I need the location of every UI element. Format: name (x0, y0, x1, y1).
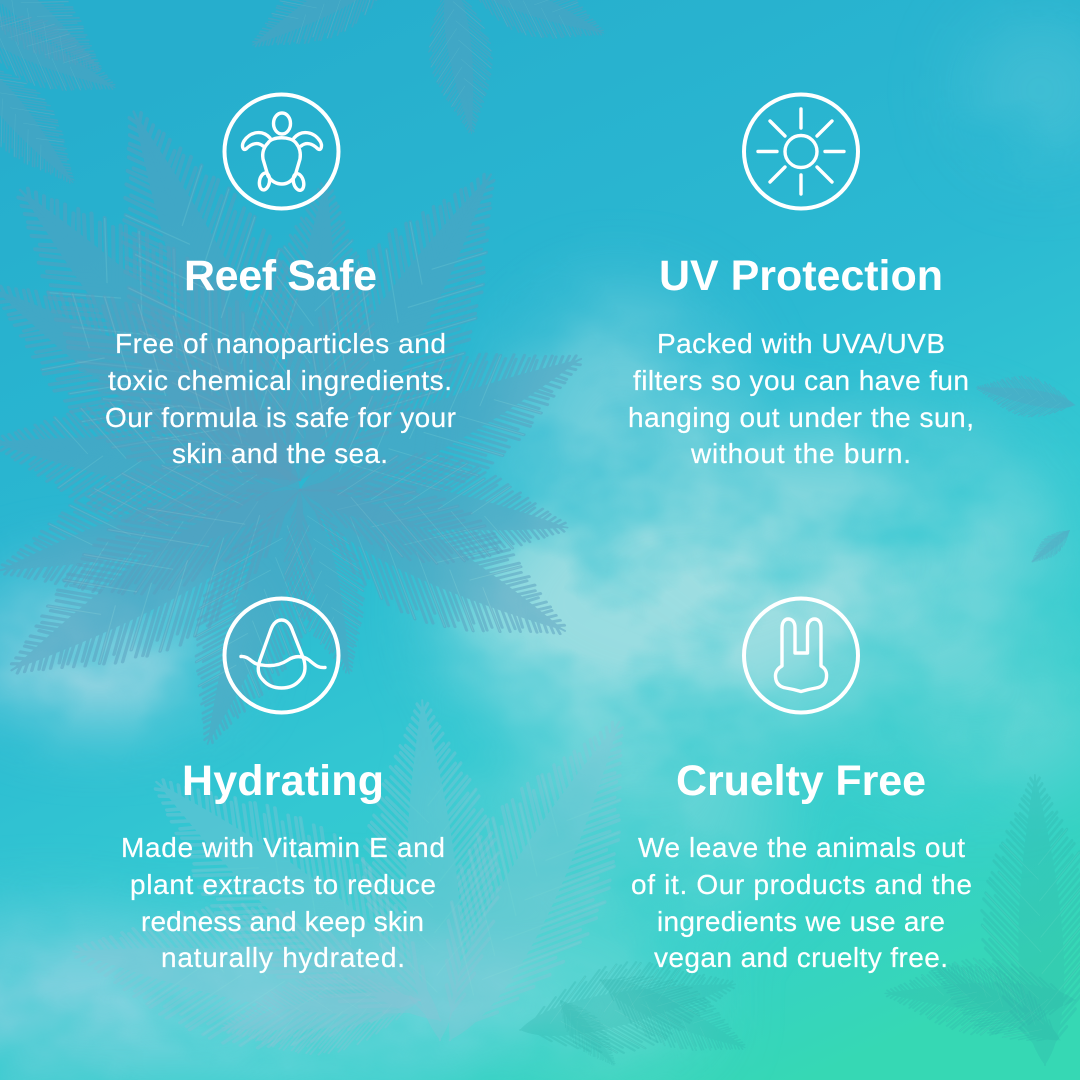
background: palm fronds, lower left tree (64, 688, 683, 1077)
background: palm fronds, upper tree (0, 0, 1078, 762)
text: hydrating description (121, 832, 445, 973)
text: cruelty free description: vegan and cruelty free. (654, 942, 948, 973)
icon: water drop with wave (224, 598, 338, 712)
text: hydrating description: naturally hydrated. (161, 942, 405, 973)
heading: Reef Safe: Reef Safe (184, 252, 377, 300)
text: reef safe description: Free of nanoparticles and (115, 328, 446, 359)
text: cruelty free description: ingredients we use are (657, 906, 945, 937)
text: uv protection description: hanging out under the sun, (628, 402, 974, 433)
icon: sun (744, 94, 858, 208)
text: reef safe description: toxic chemical ingredients. (108, 365, 452, 396)
text: hydrating description: Made with Vitamin E and (121, 832, 445, 863)
text: uv protection description: without the burn. (690, 438, 911, 469)
panel: hydrating (121, 598, 445, 973)
panel: cruelty free (631, 598, 972, 973)
text: hydrating description: redness and keep skin (141, 906, 424, 937)
text: uv protection description: filters so you can have fun (633, 365, 969, 396)
text: reef safe description (105, 328, 456, 469)
panel: reef safe (105, 94, 456, 469)
text: uv protection description (628, 328, 974, 469)
heading: UV Protection: UV Protection (659, 252, 943, 300)
text: hydrating description: plant extracts to reduce (130, 869, 436, 900)
background: palm fronds, lower right trees (511, 773, 1080, 1077)
icon: bunny (744, 598, 858, 712)
heading: Hydrating: Hydrating (182, 757, 384, 805)
text: reef safe description: skin and the sea. (172, 438, 388, 469)
text: reef safe description: Our formula is safe for your (105, 402, 456, 433)
text: uv protection description: Packed with UVA/UVB (657, 328, 945, 359)
text: cruelty free description (631, 832, 972, 973)
text: cruelty free description: We leave the animals out (638, 832, 965, 863)
heading: Cruelty Free: Cruelty Free (676, 757, 926, 805)
icon: turtle (224, 94, 338, 208)
panel: uv protection (628, 94, 974, 469)
text: cruelty free description: of it. Our products and the (631, 869, 972, 900)
